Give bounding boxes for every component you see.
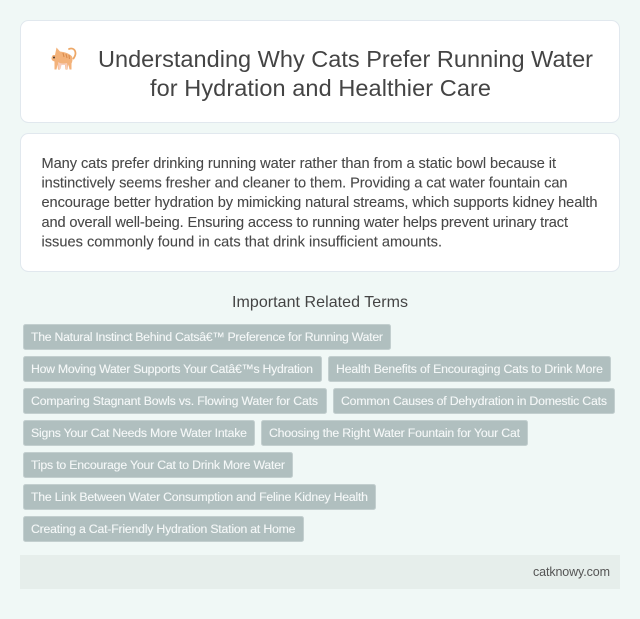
- panel: intro paragraph card: [20, 134, 620, 272]
- tag: choosing fountain: [262, 420, 528, 446]
- tag: choosing fountain: Choosing the Right Water Fountain for Your Cat: [269, 426, 521, 440]
- tag: tips: Tips to Encourage Your Cat to Drink More Water: [31, 458, 285, 472]
- tag: health benefits: Health Benefits of Encouraging Cats to Drink More: [336, 362, 603, 376]
- tag: comparing bowls: [24, 388, 326, 414]
- panel: header card: [20, 20, 620, 122]
- tag: comparing bowls: Comparing Stagnant Bowls vs. Flowing Water for Cats: [31, 394, 318, 408]
- tag: natural instinct: The Natural Instinct Behind Catsâ€™ Preference for Running Water: [31, 330, 383, 344]
- tag: kidney link: [24, 484, 376, 510]
- tag: hydration station: Creating a Cat-Friendly Hydration Station at Home: [31, 522, 296, 536]
- tag: hydration station: [24, 516, 304, 542]
- tag: moving water: [24, 356, 322, 382]
- title: for Hydration and Healthier Care: [150, 75, 491, 101]
- tag: signs: Signs Your Cat Needs More Water Intake: [31, 426, 247, 440]
- tag: dehydration causes: Common Causes of Dehydration in Domestic Cats: [341, 394, 607, 408]
- text block: intro paragraph: encourage better hydration by mimicking natural streams, which supports kidney health: [42, 195, 598, 211]
- tag: health benefits: [328, 356, 610, 382]
- panel: related term tags: [24, 324, 614, 542]
- footer text: catknowy.com: [533, 565, 610, 579]
- text block: intro paragraph: and overall well-being. Ensuring access to running water helps prevent urinary tract: [42, 215, 568, 231]
- text block: intro paragraph: [42, 156, 598, 250]
- text block: intro paragraph: instinctively seems fresher and cleaner to them. Providing a cat water fountain can: [42, 176, 568, 192]
- tag: moving water: How Moving Water Supports Your Catâ€™s Hydration: [31, 362, 313, 376]
- text block: intro paragraph: Many cats prefer drinking running water rather than from a static bowl because it: [42, 156, 556, 172]
- title: [98, 46, 593, 101]
- text block: intro paragraph: issues commonly found in cats that drink insufficient amounts.: [42, 234, 442, 250]
- footer bar: [20, 555, 620, 589]
- heading: important related terms: Important Related Terms: [232, 294, 408, 311]
- tag: natural instinct: [24, 324, 390, 350]
- title: Understanding Why Cats Prefer Running Water: [98, 46, 593, 72]
- icon: cat: [52, 48, 76, 70]
- tag: dehydration causes: [334, 388, 614, 414]
- tag: kidney link: The Link Between Water Consumption and Feline Kidney Health: [31, 490, 368, 504]
- tag: signs: [24, 420, 254, 446]
- tag: tips: [24, 452, 292, 478]
